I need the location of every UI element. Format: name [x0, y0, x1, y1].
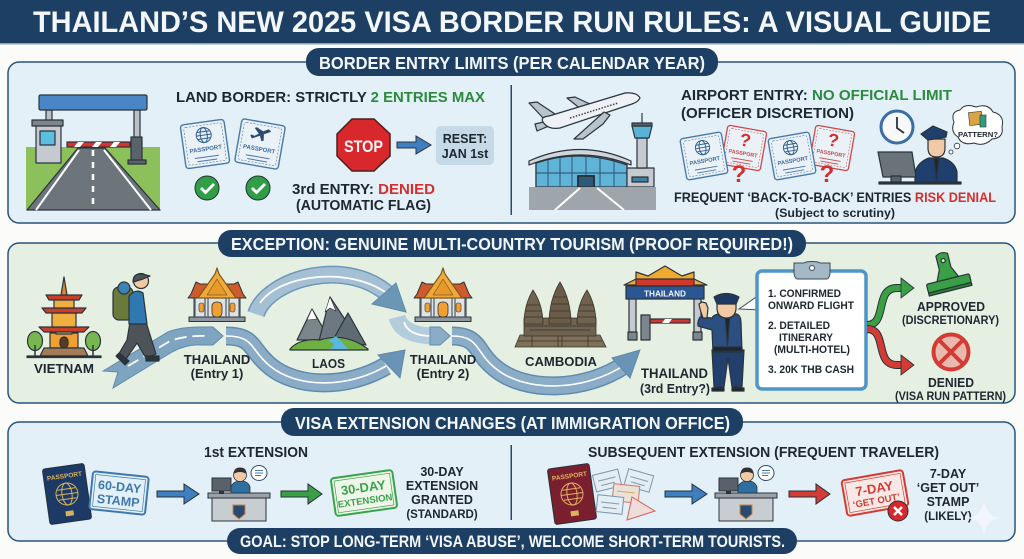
arrow: approved branch — [867, 278, 914, 325]
icon: angkor temple cambodia — [515, 282, 606, 347]
icon: passport 1 — [180, 119, 230, 169]
icon: passports with question marks, pair 1: PASSPORT — [689, 156, 721, 167]
label: approved: APPROVED — [917, 300, 985, 314]
title banner: THAILAND’S NEW 2025 VISA BORDER RUN RULES: A VISUAL GUIDE — [33, 6, 991, 39]
heading pill: visa extension: VISA EXTENSION CHANGES (AT IMMIGRATION OFFICE) — [295, 413, 730, 433]
land border heading: LAND BORDER: STRICTLY 2 ENTRIES MAX — [176, 89, 485, 106]
icon: 30-day extension stamp: 30-DAY — [340, 477, 387, 498]
icon: passports with question marks, pair 2: PASSPORT — [777, 156, 809, 167]
label: thailand third entry — [640, 366, 710, 396]
label: denied: DENIED — [928, 376, 974, 390]
label: thailand third entry: THAILAND — [641, 366, 708, 381]
icon: backpacker — [113, 274, 159, 365]
arrow: red — [789, 484, 830, 504]
third entry denied text — [292, 181, 435, 214]
icon: thai temple entry 2 — [414, 268, 472, 322]
label: thailand entry 1 — [184, 352, 250, 381]
icon: passports with question marks, pair 1: ? — [732, 161, 746, 188]
icon: thai temple entry 1 — [188, 268, 246, 322]
icon: stop sign — [337, 119, 390, 171]
arrow: blue 2 — [665, 484, 707, 504]
icon: vietnam pagoda — [27, 277, 101, 358]
text: 7-day get out stamp: 7-DAY — [930, 467, 967, 481]
text: 30-day extension granted: (STANDARD) — [406, 509, 478, 521]
label: thailand entry 1: (Entry 1) — [191, 366, 243, 381]
goal pill — [227, 528, 797, 554]
heading pill: border entry limits — [306, 48, 718, 76]
arrow: stop to reset — [397, 136, 431, 154]
speech pointer — [739, 293, 762, 310]
panel: exception multi-country tourism — [8, 230, 1015, 403]
icon: 7-day get out stamp: 7-DAY — [854, 478, 894, 499]
heading: subsequent extension: SUBSEQUENT EXTENSION (FREQUENT TRAVELER) — [588, 444, 939, 461]
icon: navy passport: PASSPORT — [47, 471, 83, 483]
thought bubble: pattern — [949, 106, 1003, 154]
icon: 60-day stamp: 60-DAY — [97, 478, 143, 496]
icon: passport 2: PASSPORT — [242, 144, 276, 156]
frequent entries warning: FREQUENT ‘BACK-TO-BACK’ ENTRIES RISK DENIAL — [674, 189, 996, 205]
icon: denied cross circle — [934, 334, 968, 370]
decorative sparkle — [967, 500, 1001, 536]
heading: first extension: 1st EXTENSION — [204, 444, 308, 461]
airport entry heading: (OFFICER DISCRETION) — [681, 105, 854, 122]
reset box: RESET: — [443, 132, 487, 146]
clipboard: required proof: ONWARD FLIGHT — [768, 300, 854, 312]
reset box: JAN 1st — [442, 147, 489, 161]
icon: 7-day get out stamp — [841, 470, 909, 521]
icon: passports with question marks, pair 2: ? — [826, 130, 841, 151]
divider — [510, 445, 512, 520]
icon: immigration officer — [698, 294, 744, 391]
icon: 30-day extension stamp: EXTENSION — [337, 492, 393, 511]
third entry denied text: (AUTOMATIC FLAG) — [296, 198, 431, 214]
clipboard: required proof: 3. 20K THB CASH — [768, 364, 854, 376]
heading pill: border entry limits: BORDER ENTRY LIMITS (PER CALENDAR YEAR) — [319, 53, 705, 73]
label: denied: (VISA RUN PATTERN) — [895, 391, 1006, 403]
label: approved: (DISCRETIONARY) — [902, 315, 999, 327]
icon: maroon passport — [547, 463, 597, 525]
icon: airport terminal and tower — [529, 113, 656, 210]
goal pill: GOAL: STOP LONG-TERM ‘VISA ABUSE’, WELCOME SHORT-TERM TOURISTS. — [240, 532, 785, 551]
clipboard: required proof: 2. DETAILED — [768, 320, 830, 332]
panel: visa extension changes — [8, 408, 1015, 554]
clipboard: required proof: 1. CONFIRMED — [768, 288, 841, 300]
label: denied — [895, 376, 1006, 403]
label: thailand entry 2: (Entry 2) — [417, 366, 469, 381]
label: thailand third entry: (3rd Entry?) — [640, 382, 710, 396]
label: thailand entry 2 — [410, 352, 476, 381]
arrow: blue 1 — [157, 484, 199, 504]
text: 7-day get out stamp: STAMP — [927, 495, 969, 509]
frequent entries warning: (Subject to scrutiny) — [775, 206, 895, 220]
panel: border entry limits — [8, 48, 1015, 223]
icon: navy passport — [42, 463, 92, 525]
heading pill: exception — [218, 230, 806, 257]
text: 30-day extension granted — [406, 465, 478, 521]
third entry denied text: 3rd ENTRY: DENIED — [292, 181, 435, 198]
text: 7-day get out stamp: (LIKELY) — [924, 511, 972, 523]
text: 7-day get out stamp — [917, 467, 979, 523]
arrow: green — [281, 484, 322, 504]
icon: stop sign: STOP — [344, 137, 383, 156]
icon: green approval stamp — [920, 248, 972, 296]
icon: passports with question marks, pair 2: ? — [820, 161, 834, 188]
icon: thailand border gate: THAILAND — [644, 288, 686, 298]
label: thailand entry 2: THAILAND — [410, 352, 476, 367]
clipboard: required proof: ITINERARY — [779, 332, 834, 344]
reset box — [436, 126, 494, 165]
label: approved — [902, 300, 999, 327]
icon: thailand border gate — [624, 266, 707, 340]
label: cambodia: CAMBODIA — [525, 355, 597, 369]
airport entry heading — [681, 87, 952, 122]
clipboard: required proof: (MULTI-HOTEL) — [774, 344, 850, 356]
icon: 30-day extension stamp — [331, 470, 397, 516]
heading pill: exception: EXCEPTION: GENUINE MULTI-COUNTRY TOURISM (PROOF REQUIRED!) — [231, 234, 793, 254]
icon: passport 1: PASSPORT — [189, 145, 223, 155]
icon: airplane — [529, 93, 640, 139]
icon: 60-day stamp — [89, 471, 149, 515]
icon: 7-day get out stamp: ‘GET OUT’ — [852, 492, 901, 511]
icon: passports with question marks, pair 2: PASSPORT — [816, 149, 847, 160]
text: 7-day get out stamp: ‘GET OUT’ — [917, 481, 979, 495]
thought bubble: pattern: PATTERN? — [958, 132, 998, 139]
arrow: denied branch — [867, 329, 914, 375]
icon: clock — [881, 111, 913, 143]
airport entry heading: AIRPORT ENTRY: NO OFFICIAL LIMIT — [681, 87, 952, 104]
icon: maroon passport: PASSPORT — [552, 471, 588, 483]
clipboard: required proof — [757, 262, 866, 389]
icon: passports with question marks, pair 1: PASSPORT — [728, 149, 759, 160]
heading pill: visa extension — [281, 408, 743, 436]
label: laos: LAOS — [312, 357, 345, 371]
label: thailand entry 1: THAILAND — [184, 352, 250, 367]
icon: passports with question marks, pair 1 — [680, 125, 767, 188]
icon: laos mountains — [290, 297, 368, 350]
icon: green check 1 — [195, 176, 219, 200]
frequent entries warning — [674, 189, 996, 220]
icon: land border checkpoint — [26, 95, 160, 210]
icon: passports with question marks, pair 2 — [768, 125, 855, 188]
icon: passport 2 — [235, 119, 285, 169]
text: 30-day extension granted: EXTENSION — [406, 479, 478, 493]
text: 30-day extension granted: 30-DAY — [420, 465, 464, 479]
route arrows — [103, 275, 640, 388]
icon: officer at computer — [878, 126, 961, 184]
icon: green check 2 — [246, 176, 270, 200]
icon: officer at desk 1 — [208, 466, 270, 521]
divider — [510, 85, 512, 215]
label: vietnam: VIETNAM — [34, 362, 94, 376]
text: 30-day extension granted: GRANTED — [411, 493, 473, 507]
icon: 60-day stamp: STAMP — [96, 492, 140, 510]
icon: officer at desk 2 — [715, 466, 777, 521]
icon: passports with question marks, pair 1: ? — [738, 130, 753, 151]
icon: cluster of entry stamps — [592, 469, 655, 520]
